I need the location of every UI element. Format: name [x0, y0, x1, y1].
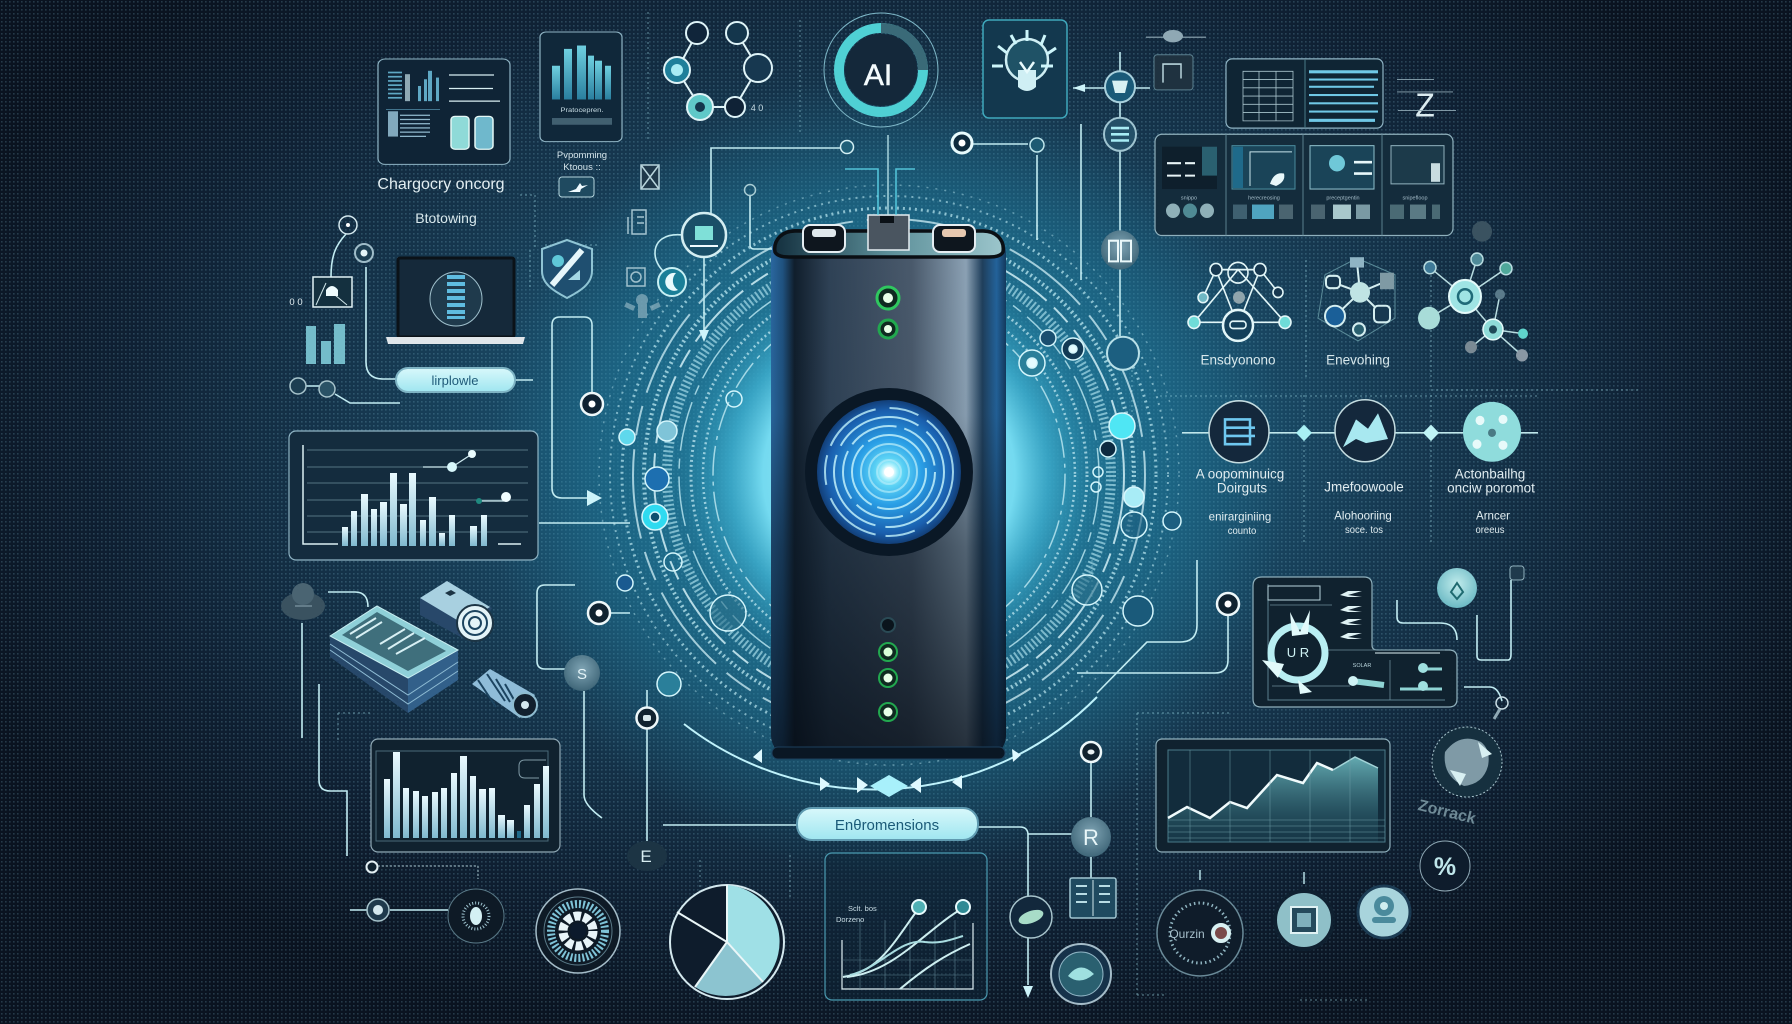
node: dark script: [627, 841, 667, 871]
pie chart: [670, 885, 784, 999]
text: column 1: counto: [1228, 526, 1256, 537]
laptop: [386, 258, 525, 344]
label: Z glyph: [1397, 80, 1456, 124]
label: Z glyph: Z: [1415, 87, 1435, 124]
screen 1: [1162, 147, 1217, 218]
heading: Btotowing: Btotowing: [415, 210, 477, 226]
scanner lens: [805, 388, 973, 556]
icon: book: [1070, 878, 1116, 918]
battery top face: [775, 231, 1003, 257]
panel: line chart: Dorzeno: [836, 915, 864, 924]
loop end ring: [581, 393, 603, 415]
icon: camera button: [1358, 886, 1410, 938]
panel: bar chart bottom: [371, 739, 560, 852]
text: Pvpomming Ktoous: Pvpomming: [557, 150, 607, 161]
node bottom-left: [367, 899, 389, 921]
ring connector: right: [1217, 593, 1239, 615]
small nodes: [290, 378, 335, 397]
isometric document stack: [330, 606, 458, 713]
ring nodes: [617, 330, 1181, 696]
node: eye: [1010, 896, 1052, 938]
icon: dial with label: Qurzin: [1169, 927, 1205, 941]
node: top shield: [1105, 71, 1135, 102]
node: dark script: E: [640, 847, 652, 866]
node: monitor: [682, 213, 726, 257]
battery terminals: [803, 215, 975, 252]
arrow tips: [587, 84, 1085, 998]
text: column 3: Arncer: [1476, 509, 1510, 523]
connector lines: [302, 52, 1511, 985]
node: script circle: S: [577, 666, 587, 683]
panel: recycling controls: U R: [1287, 645, 1309, 660]
screen 3: [1310, 146, 1374, 219]
network A: [1188, 262, 1291, 341]
bottom arc with arrows: [684, 697, 1097, 797]
status LEDs: [877, 287, 899, 721]
node: script circle: [564, 655, 600, 691]
node: shield ring: [355, 244, 373, 262]
mini bar chart: [306, 324, 345, 364]
text: column 2: [1324, 480, 1404, 536]
icon: small square: [627, 268, 645, 286]
label: 4 0: 4 0: [751, 103, 763, 113]
AI badge: [824, 13, 938, 127]
text: column 2: Alohooriing: [1334, 509, 1392, 523]
icon: scanning circle: [448, 889, 504, 943]
ring connector: lower: [636, 708, 658, 728]
panel: recycling controls: [1253, 577, 1457, 707]
ring connector: mid-left: [588, 602, 610, 624]
node: leaf dial: [1051, 944, 1111, 1004]
icon: puppet cluster: [624, 294, 661, 318]
icon: dial with label: [1157, 890, 1243, 976]
text: column 3: oreeus: [1475, 525, 1505, 536]
panel: line chart: [825, 853, 987, 1000]
ring connector: R: [1081, 742, 1101, 762]
screen 2: herecreosing: [1248, 195, 1280, 201]
node: small ring C: [339, 216, 357, 234]
timeline icon: list: [1209, 401, 1269, 463]
battery body: [771, 229, 1006, 759]
label: 0 0: 0 0: [289, 297, 303, 308]
ring connector: [952, 133, 972, 153]
panel: charging dashboard: [378, 59, 510, 164]
node: moon: [658, 268, 686, 296]
icon: corner square: [1154, 55, 1193, 90]
screen 4: snipefloop: [1402, 195, 1428, 201]
text: column 3: [1447, 466, 1535, 536]
text: column 1: [1196, 466, 1284, 537]
node: building: [1101, 230, 1139, 270]
icon: bolt button: [559, 177, 594, 197]
panel: tall bar chart: [540, 32, 622, 142]
text: column 3: Actonbailhg: [1455, 466, 1525, 481]
node: list: [1104, 118, 1136, 151]
node: R: [1071, 817, 1111, 857]
text: Pvpomming Ktoous: Ktoous ::: [563, 162, 601, 173]
panel: four screens: [1155, 134, 1453, 236]
text: column 2: Jmefoowoole: [1324, 480, 1404, 495]
icon: door device: [628, 210, 646, 234]
screen 2: [1232, 146, 1295, 219]
panel: tall bar chart: Pratocepren.: [561, 108, 604, 114]
battery: [771, 215, 1006, 759]
diagram: node ring: [664, 22, 772, 120]
icon: shield: [542, 240, 592, 298]
label: rotated text: Zorrack: [1416, 797, 1478, 828]
icon: light recycle button: [1437, 568, 1477, 608]
icon: top chip: [1146, 30, 1206, 42]
network B: [1318, 257, 1395, 341]
pill: Enviromensions: [797, 808, 978, 840]
icon: square button: [1275, 891, 1333, 949]
timeline icon: dots: [1463, 402, 1521, 462]
pill: lirplowle: [396, 368, 515, 392]
panel: bar chart left: [289, 431, 538, 560]
text: column 1: Doirguts: [1217, 481, 1267, 496]
label: Enevohing: Enevohing: [1326, 352, 1390, 368]
icon: small chip: [1510, 566, 1524, 580]
screen 1: snippo: [1181, 195, 1197, 201]
icon: small pin: [1494, 697, 1508, 719]
network C: [1418, 221, 1528, 362]
circuit ring halo: [599, 185, 1179, 765]
icon: percent: %: [1434, 853, 1456, 881]
panel: recycling controls: SOLAR: [1353, 663, 1371, 669]
heading: Chargocry oncorg: Chargocry oncorg: [377, 176, 505, 193]
pill: lirplowle: lirplowle: [432, 373, 478, 388]
node: R: R: [1083, 825, 1099, 850]
panel: area chart: [1156, 739, 1390, 852]
pill: Enviromensions: Enθromensions: [835, 817, 939, 834]
icon: cloud: [281, 583, 325, 620]
AI badge: AI: [864, 59, 892, 92]
connector ring bottom-left: [366, 862, 478, 879]
node: small ring A: [744, 184, 756, 196]
text: column 2: soce. tos: [1345, 525, 1383, 536]
node: small ring B: [840, 140, 854, 154]
icon: light bulb panel: [983, 20, 1067, 118]
panel: data table: [1226, 59, 1383, 128]
text: column 3: onciw poromot: [1447, 481, 1535, 496]
screen 4: [1390, 146, 1444, 219]
screen 3: preceptgentin: [1326, 195, 1360, 201]
icon: gear: [536, 889, 620, 973]
icon: hourglass: [641, 165, 659, 189]
timeline line with diamonds: [1182, 425, 1538, 441]
text: column 1: enirarginiing: [1209, 510, 1271, 524]
central glow: [489, 75, 1289, 875]
panel: line chart: Sclt. bos: [848, 904, 877, 913]
ring connector end: [1030, 138, 1044, 152]
icon: globe: [1432, 727, 1502, 797]
battery roll small: [472, 669, 537, 718]
battery roll large: [420, 581, 493, 642]
icon frame: device: [313, 277, 352, 307]
label: Ensdyonono: Ensdyonono: [1200, 352, 1276, 368]
text: column 1: A oopominuicg: [1196, 466, 1284, 481]
node: lower ring: [1107, 337, 1139, 370]
icon: percent: [1420, 841, 1470, 891]
timeline icon: mountains: [1335, 400, 1395, 462]
